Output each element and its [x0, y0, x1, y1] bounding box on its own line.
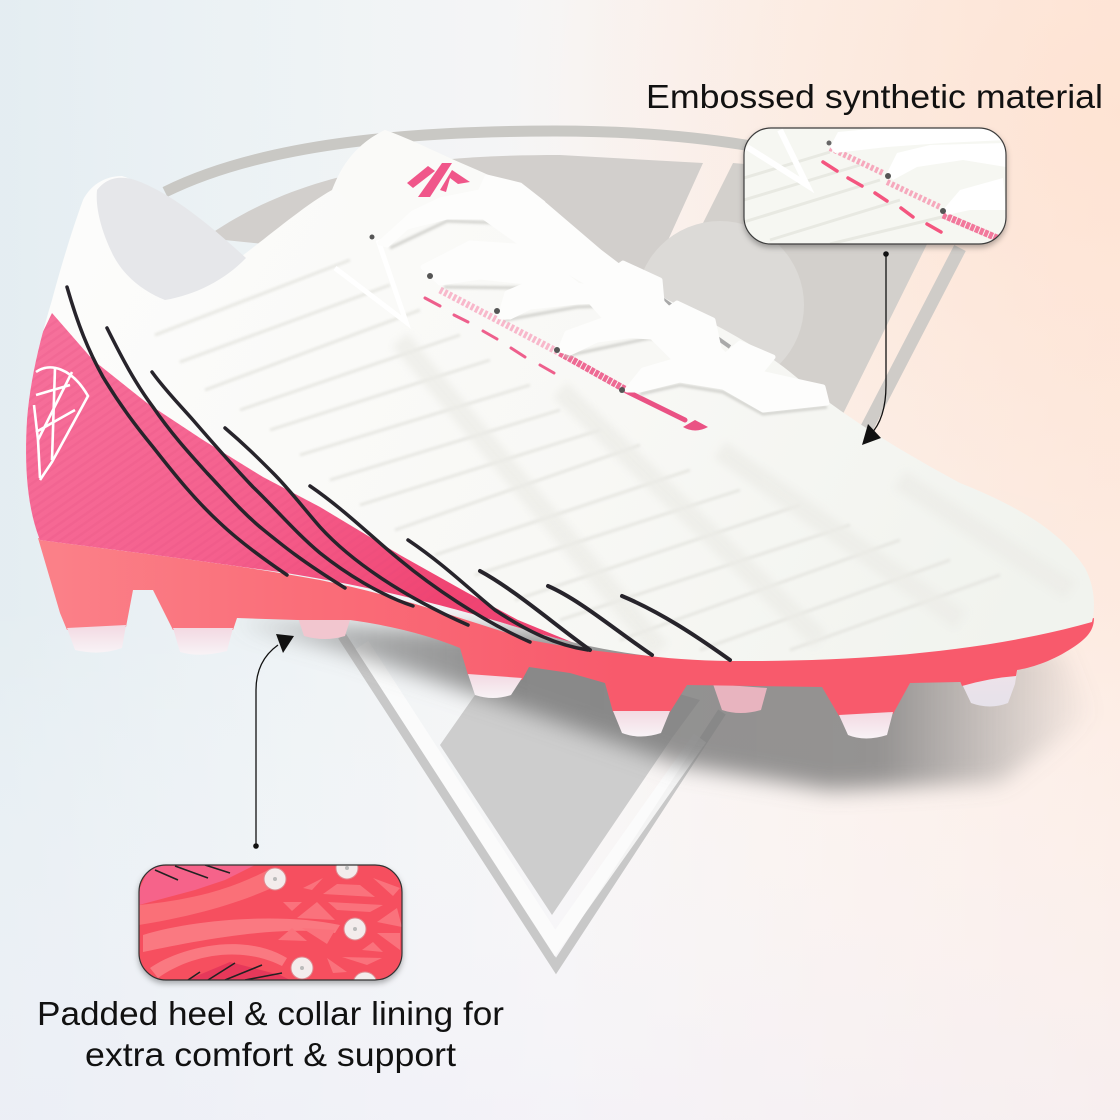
inset: upper material close-up	[744, 128, 1006, 244]
tongue logo	[407, 163, 470, 197]
football boot	[10, 130, 1094, 738]
collar lining	[97, 178, 246, 300]
eyestay stitching	[425, 290, 708, 430]
callout text: padded heel	[37, 995, 504, 1073]
callout text: padded heel: extra comfort & support	[85, 1036, 456, 1073]
tongue	[335, 130, 525, 225]
arrow: from sole inset to stud plate	[253, 634, 294, 849]
callout heading: embossed material: Embossed synthetic material	[646, 78, 1103, 115]
heel pink panel	[10, 313, 596, 652]
upper	[26, 130, 1094, 661]
heel logo	[34, 367, 88, 480]
eyelets	[370, 234, 625, 393]
arrow: from material inset to upper	[862, 251, 889, 445]
watermark: brand shield logo	[165, 131, 960, 966]
white stud tips	[67, 625, 893, 738]
lace soft shadows	[390, 221, 827, 414]
lace gap shadow	[597, 253, 730, 347]
laces	[380, 177, 827, 410]
side v logo	[335, 240, 406, 322]
far-side studs	[298, 618, 1018, 713]
black speed stripes	[67, 287, 730, 660]
callout text: padded heel: Padded heel & collar lining for	[37, 995, 504, 1032]
upper embossed texture	[155, 260, 1000, 650]
shoe ground shadow	[235, 622, 1092, 790]
inset: soleplate close-up	[139, 857, 402, 996]
sole and rear studs	[38, 538, 1094, 716]
